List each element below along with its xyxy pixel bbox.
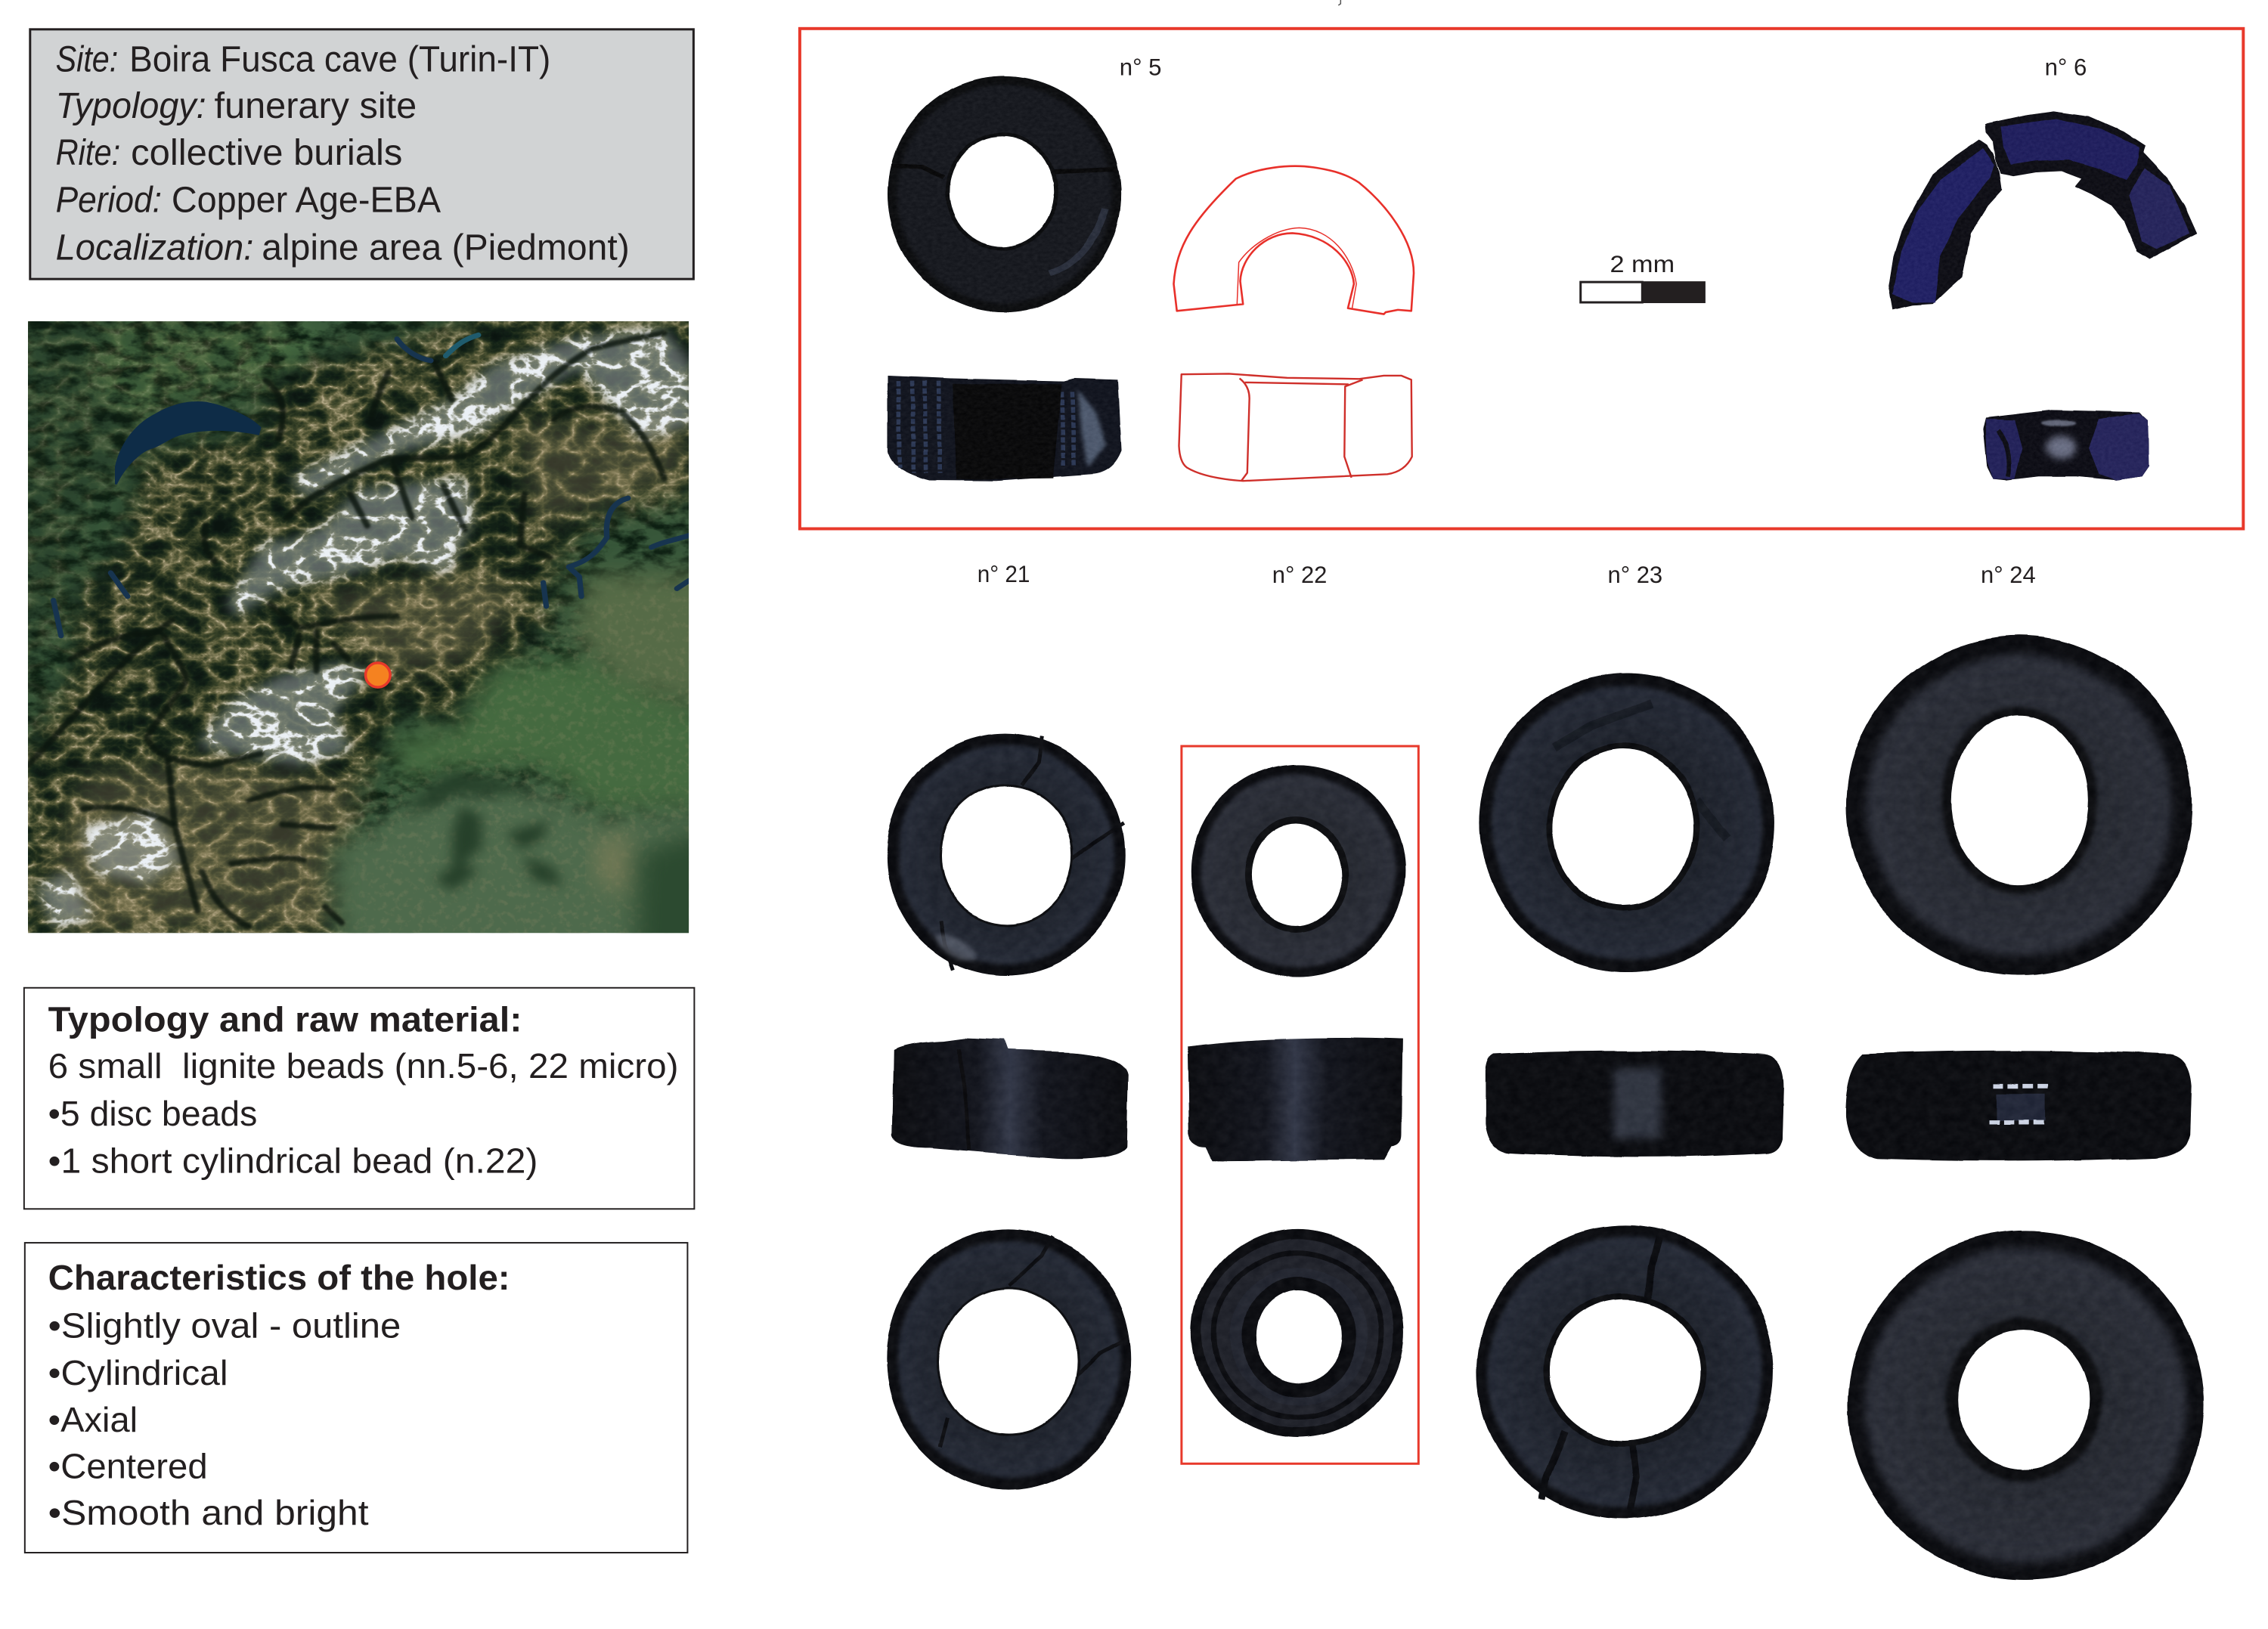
scale label: 2 mm xyxy=(1610,250,1675,277)
left column upper group xyxy=(30,29,693,279)
bead 6 photos xyxy=(1888,111,2197,480)
alpine relief xyxy=(28,321,693,937)
bead 5 top view photo xyxy=(888,76,1121,312)
bead 24 bottom view xyxy=(1847,1231,2204,1580)
description list: •5 disc beads xyxy=(48,1094,257,1133)
Lake Brienz xyxy=(446,335,479,356)
snow cover xyxy=(28,321,693,937)
Monferrato hills xyxy=(405,773,562,891)
panel background xyxy=(30,29,693,279)
bead 21 bottom view xyxy=(886,1228,1131,1490)
site details text: Typology: xyxy=(56,86,206,126)
bead 5 photos and red drawings xyxy=(888,76,1414,481)
left fragment xyxy=(1888,139,2002,310)
panel: site information xyxy=(30,29,693,279)
site details text: Boira Fusca cave (Turin-IT) xyxy=(129,40,550,80)
characteristics list xyxy=(48,1305,401,1532)
bead 6 fragments top view xyxy=(1888,111,2197,310)
description list: •1 short cylindrical bead (n.22) xyxy=(48,1141,538,1181)
characteristics list: •Smooth and bright xyxy=(48,1493,369,1532)
panel border xyxy=(24,988,694,1209)
scale rectangle xyxy=(1581,282,1642,302)
bead 22 side view xyxy=(1187,1038,1403,1161)
site details text: funerary site xyxy=(215,86,417,126)
site marker xyxy=(366,663,390,687)
bead 22 bottom view with concentric grooves xyxy=(1192,1228,1404,1437)
characteristics list: •Centered xyxy=(48,1447,208,1486)
site details text xyxy=(56,40,630,268)
northern plateau lighter tone xyxy=(96,321,316,423)
site details text: Period: xyxy=(56,181,162,221)
characteristics list: •Axial xyxy=(48,1400,138,1439)
label n° 22: n° 22 xyxy=(1272,561,1327,588)
label n° 24: n° 24 xyxy=(1981,561,2036,588)
panel: typology and raw material xyxy=(24,988,694,1209)
bead 23 bottom view xyxy=(1476,1225,1774,1519)
southeast hills xyxy=(634,820,728,970)
middle fragment xyxy=(1985,111,2146,200)
bead 5 side view photo xyxy=(888,376,1122,481)
main valleys xyxy=(28,333,664,927)
site details text: Site: xyxy=(56,40,118,80)
Po plain north xyxy=(392,659,728,813)
description list: 6 small lignite beads (nn.5-6, 22 micro) xyxy=(48,1046,678,1085)
left column lower group xyxy=(24,988,694,1553)
plain speckle xyxy=(28,321,693,937)
label n° 21: n° 21 xyxy=(978,560,1030,587)
satellite map of the western Alps xyxy=(28,321,689,933)
Lombardy urban plain xyxy=(562,560,689,708)
bead 5 red line drawing, side view xyxy=(1179,373,1412,481)
lower beads group xyxy=(886,636,2204,1580)
bead 6 side view xyxy=(1983,410,2149,480)
scale bar xyxy=(1581,250,1706,303)
bead 23 side view xyxy=(1485,1051,1784,1157)
site details text: alpine area (Piedmont) xyxy=(262,228,630,268)
right fragment xyxy=(2091,150,2197,259)
small speck at top edge xyxy=(1338,0,1340,5)
characteristics list: •Cylindrical xyxy=(48,1353,228,1392)
description list xyxy=(48,1046,678,1181)
northern foothill relief xyxy=(28,321,301,693)
label n° 5: n° 5 xyxy=(1120,53,1162,80)
heading: Characteristics of the hole: xyxy=(48,1258,510,1297)
red frame xyxy=(800,29,2243,528)
brown farmland xyxy=(596,832,632,899)
panel border xyxy=(25,1243,687,1553)
panel: characteristics of the hole xyxy=(25,1243,687,1553)
heading: Typology and raw material: xyxy=(48,999,522,1039)
panel: beads 5 and 6 frame and labels xyxy=(800,0,2243,588)
red frame around bead 22 xyxy=(1182,746,1418,1463)
Lake Geneva xyxy=(115,401,262,485)
snow haze xyxy=(36,329,693,927)
site details text: Rite: xyxy=(56,133,120,173)
bead 5 red line drawing, top view xyxy=(1174,166,1414,314)
bead 21 side view xyxy=(892,1038,1128,1158)
bead 21 top view xyxy=(887,733,1124,976)
site details text: collective burials xyxy=(131,133,402,173)
forest texture xyxy=(28,321,693,937)
bead 23 top view xyxy=(1479,674,1774,973)
characteristics list: •Slightly oval - outline xyxy=(48,1305,401,1345)
Po plain south xyxy=(319,777,689,933)
label n° 6: n° 6 xyxy=(2045,53,2087,80)
northern and southern lakes xyxy=(54,339,689,636)
map base xyxy=(28,321,693,937)
sunlit slopes xyxy=(54,423,689,933)
site details text: Copper Age-EBA xyxy=(172,181,441,221)
site details text: Localization: xyxy=(56,228,253,268)
bead 24 top view xyxy=(1846,636,2192,976)
bead 22 top view xyxy=(1191,765,1405,977)
bead 24 side view xyxy=(1845,1051,2192,1162)
label n° 23: n° 23 xyxy=(1608,561,1662,588)
